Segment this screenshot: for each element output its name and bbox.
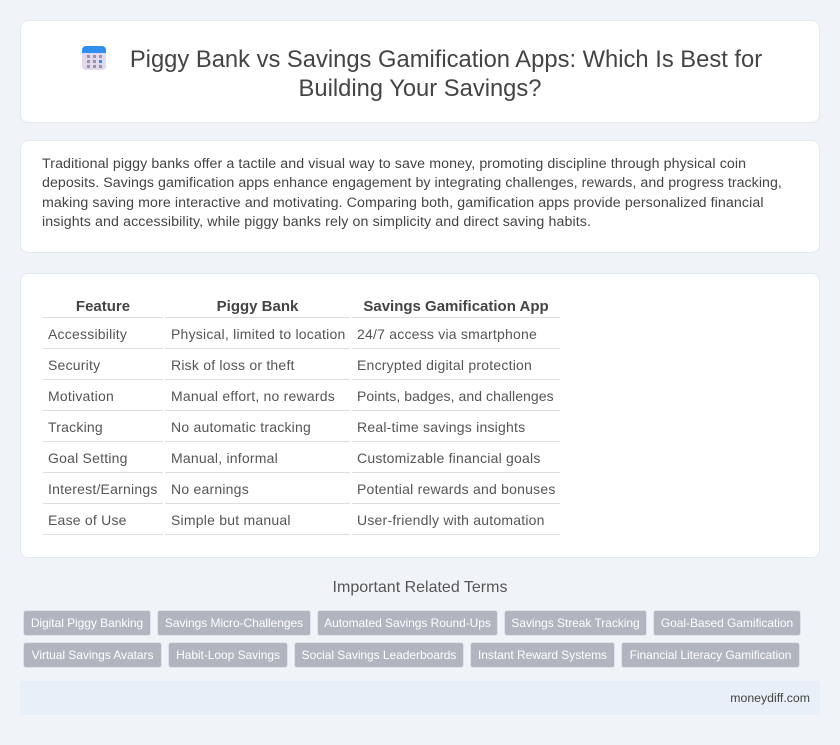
comparison table: Potential rewards and bonuses <box>357 481 556 497</box>
intro text block: insights and accessibility, while piggy banks rely on simplicity and direct saving habits. <box>42 214 591 230</box>
comparison table: Encrypted digital protection <box>357 357 532 373</box>
footer bar <box>20 681 820 715</box>
related term tags: Habit-Loop Savings <box>176 648 280 662</box>
intro text block <box>42 156 782 230</box>
comparison table: User-friendly with automation <box>357 512 545 528</box>
intro text block: deposits. Savings gamification apps enhance engagement by integrating challenges, rewards, and progress tracking, <box>42 175 782 191</box>
comparison table: Accessibility <box>48 326 127 342</box>
comparison table <box>43 298 560 535</box>
table header row: Piggy Bank <box>217 298 298 315</box>
related term tags: Social Savings Leaderboards <box>302 648 456 662</box>
panel: introduction text <box>20 140 820 253</box>
comparison table: Motivation <box>48 388 114 404</box>
intro text block: making saving more interactive and motivating. Comparing both, gamification apps provide personalized financial <box>42 195 764 211</box>
heading: important related terms: Important Related Terms <box>333 579 507 596</box>
comparison table: Tracking <box>48 419 103 435</box>
comparison table: Ease of Use <box>48 512 127 528</box>
related term tags: Digital Piggy Banking <box>31 616 143 630</box>
comparison table: Customizable financial goals <box>357 450 541 466</box>
comparison table: Goal Setting <box>48 450 128 466</box>
related term tags: Virtual Savings Avatars <box>32 648 153 662</box>
title: Building Your Savings? <box>299 75 541 102</box>
comparison table: No automatic tracking <box>171 419 311 435</box>
table header row: Savings Gamification App <box>363 298 549 315</box>
related term tags: Automated Savings Round-Ups <box>324 616 491 630</box>
footer source: moneydiff.com <box>730 691 810 705</box>
title: Piggy Bank vs Savings Gamification Apps: Which Is Best for <box>130 46 762 73</box>
icon: calendar <box>82 46 106 70</box>
related term tags: Savings Micro-Challenges <box>165 616 303 630</box>
comparison table: Manual, informal <box>171 450 278 466</box>
table header row: Feature <box>76 298 130 315</box>
comparison table: Physical, limited to location <box>171 326 345 342</box>
panel: comparison table <box>20 273 820 558</box>
panel: title header <box>20 20 820 123</box>
comparison table: Interest/Earnings <box>48 481 158 497</box>
related term tags: Savings Streak Tracking <box>511 616 640 630</box>
related term tags: Instant Reward Systems <box>478 648 607 662</box>
comparison table: Security <box>48 357 100 373</box>
comparison table: Points, badges, and challenges <box>357 388 554 404</box>
comparison table: Real-time savings insights <box>357 419 525 435</box>
table header row <box>76 298 549 315</box>
comparison table: Manual effort, no rewards <box>171 388 335 404</box>
intro text block: Traditional piggy banks offer a tactile and visual way to save money, promoting discipline through physical coin <box>42 156 746 172</box>
comparison table: Simple but manual <box>171 512 291 528</box>
related term tags: Goal-Based Gamification <box>661 616 793 630</box>
comparison table: No earnings <box>171 481 249 497</box>
related term tags <box>23 610 801 668</box>
comparison table: 24/7 access via smartphone <box>357 326 537 342</box>
comparison table: Risk of loss or theft <box>171 357 295 373</box>
related term tags: Financial Literacy Gamification <box>630 648 791 662</box>
title <box>130 46 762 102</box>
